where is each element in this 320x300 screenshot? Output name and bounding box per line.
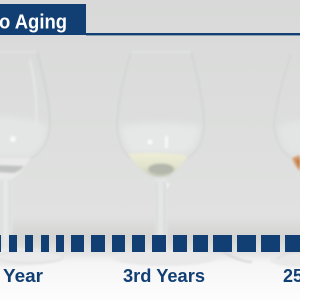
label: 3rd years: 3rd Years <box>123 266 205 286</box>
amber wine <box>292 155 300 171</box>
wine glass: 1st year <box>0 52 65 266</box>
header banner <box>0 4 300 35</box>
wine glass: 25th year <box>270 54 320 267</box>
wine glass: 3rd year <box>113 52 252 266</box>
timeline: dashed bar of squares <box>0 235 300 252</box>
white wine <box>128 153 188 177</box>
label: 1st year: Year <box>3 266 43 286</box>
title: o Aging <box>0 10 67 34</box>
